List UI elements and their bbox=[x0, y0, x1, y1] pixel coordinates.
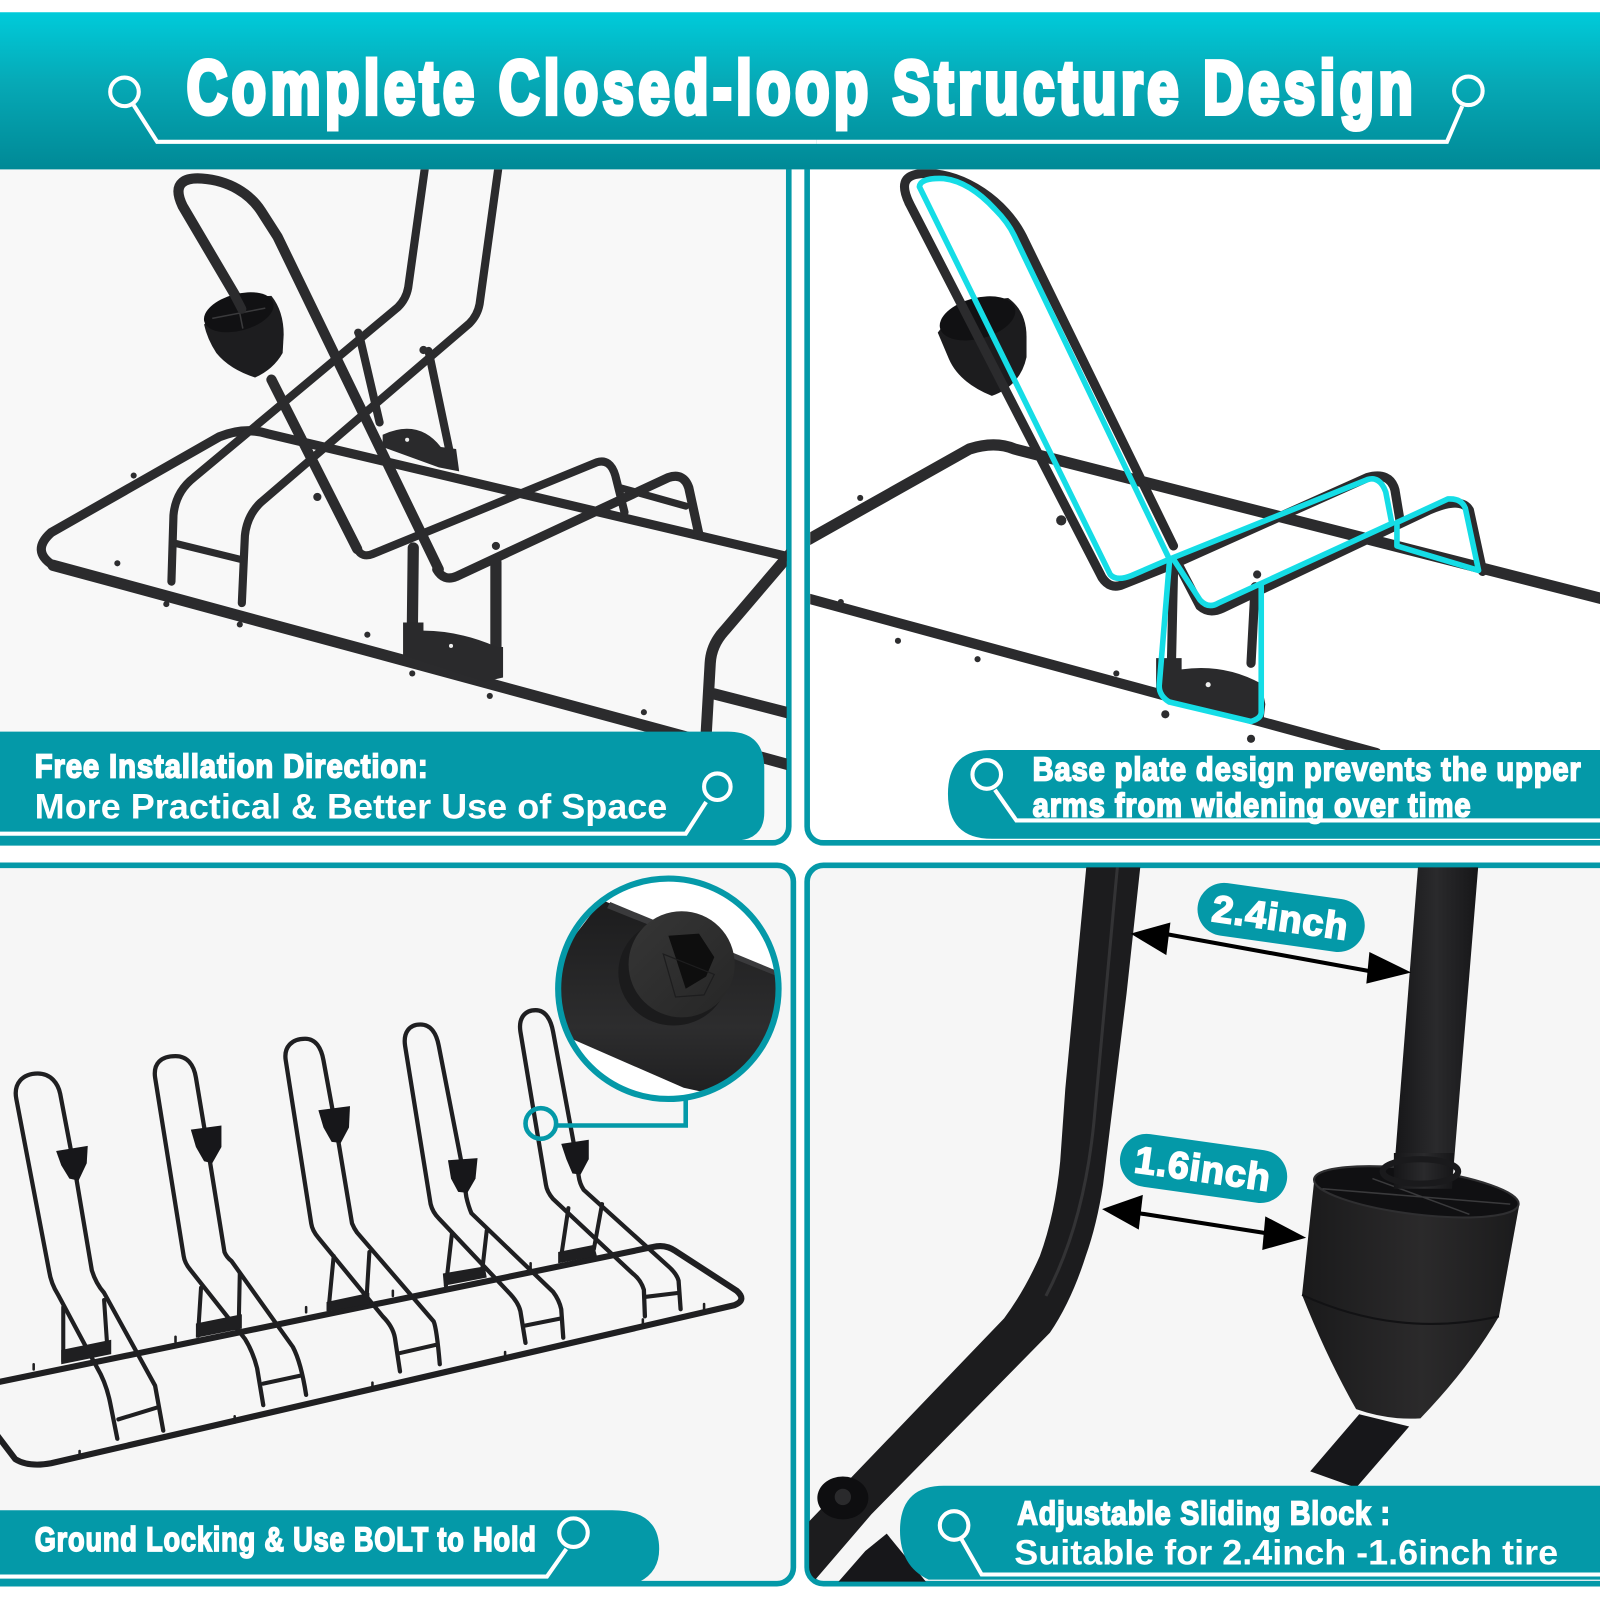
caption bar: adjustable sliding block bbox=[900, 1486, 1600, 1580]
callout connector bbox=[526, 1098, 686, 1139]
rack unit 3 bbox=[285, 1039, 440, 1371]
panel: base plate design bbox=[806, 153, 1600, 843]
dimension arrow 2.4 inch bbox=[1131, 922, 1411, 984]
rail ticks bbox=[34, 1263, 704, 1457]
rack unit 2 bbox=[155, 1056, 306, 1405]
caption bar: ground locking bbox=[0, 1510, 659, 1582]
rack photo: top left bbox=[41, 163, 791, 765]
title bracket right bbox=[816, 77, 1483, 142]
cyan closed-loop outline bbox=[919, 178, 1479, 721]
caption bar: free installation: Free Installation Direction: bbox=[35, 749, 429, 786]
panel: ground locking bbox=[0, 865, 796, 1584]
dimension arrow 1.6 inch bbox=[1102, 1195, 1306, 1250]
caption bar: free installation bbox=[0, 732, 764, 841]
panel: free installation direction bbox=[0, 153, 791, 843]
close-up photo of tubes and cone bbox=[806, 862, 1521, 1587]
caption bar: adjustable sliding block: Adjustable Sliding Block : bbox=[1017, 1495, 1391, 1532]
cone slider bbox=[935, 289, 1027, 396]
magnifier: bolt detail bbox=[555, 876, 782, 1102]
rack unit 4 bbox=[405, 1024, 563, 1343]
rack unit 5 bbox=[520, 1010, 681, 1316]
cone slider block bbox=[1302, 1153, 1521, 1419]
header banner bbox=[0, 12, 1600, 169]
label pill 1.6 inch: 1.6inch bbox=[1132, 1138, 1274, 1199]
cone slider bbox=[204, 292, 284, 378]
label pill 2.4 inch bbox=[1194, 879, 1368, 955]
bolt bbox=[817, 1477, 868, 1519]
caption bar: ground locking: Ground Locking & Use BOLT to Hold bbox=[35, 1521, 537, 1559]
label pill 2.4 inch: 2.4inch bbox=[1210, 887, 1351, 948]
rack unit 1 bbox=[16, 1073, 163, 1439]
rack photo with cyan outline bbox=[806, 173, 1600, 753]
title bracket left bbox=[110, 78, 816, 142]
caption bar: adjustable sliding block: Suitable for 2.4inch -1.6inch tire bbox=[1014, 1533, 1558, 1572]
five-unit bike rack bbox=[0, 1010, 741, 1465]
panel: adjustable sliding block bbox=[806, 862, 1600, 1587]
caption bar: free installation: More Practical & Better Use of Space bbox=[35, 787, 667, 826]
caption bar: base plate: arms from widening over time bbox=[1033, 787, 1471, 824]
bolts bbox=[114, 329, 647, 715]
label pill 1.6 inch bbox=[1117, 1130, 1291, 1206]
caption bar: base plate bbox=[948, 750, 1600, 839]
